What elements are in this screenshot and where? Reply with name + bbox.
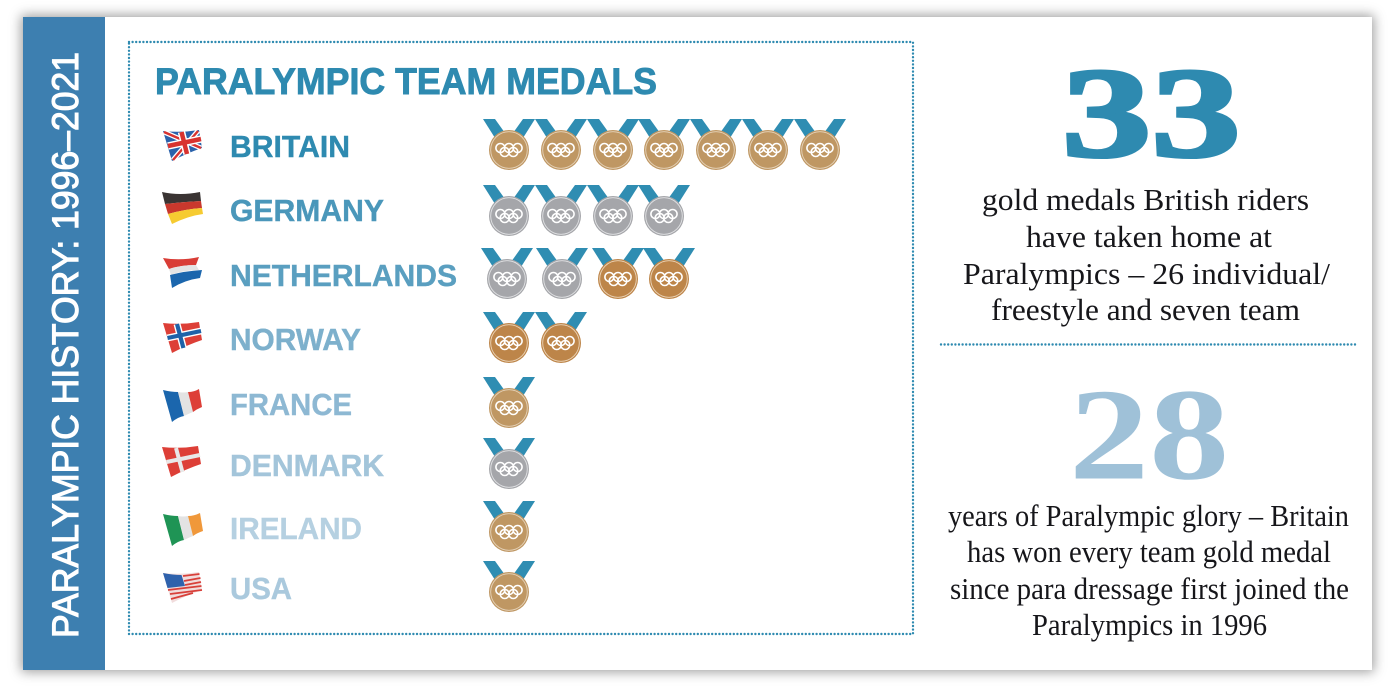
label: Germany: GERMANY — [230, 193, 384, 228]
medal: Ireland — [483, 501, 535, 552]
panel: team medals — [129, 42, 913, 634]
stat number: 28: 28 — [1069, 362, 1229, 507]
flag: USA — [163, 572, 202, 603]
flag: Denmark — [162, 446, 201, 477]
heading: Paralympic team medals: PARALYMPIC TEAM MEDALS — [155, 61, 657, 102]
stat text: gold medals: gold medals British riders — [982, 182, 1309, 217]
stat text: gold medals: have taken home at — [1026, 219, 1272, 254]
label: Norway: NORWAY — [230, 322, 361, 357]
label: Ireland: IRELAND — [230, 511, 362, 546]
stat text: gold medals: freestyle and seven team — [991, 292, 1300, 327]
medals: Netherlands — [481, 248, 695, 299]
side band: Paralympic history — [23, 17, 105, 670]
label: Denmark: DENMARK — [230, 448, 385, 483]
stat text: years of glory: Paralympics in 1996 — [1032, 607, 1267, 642]
label: France: FRANCE — [230, 387, 352, 422]
flag: Norway — [163, 322, 202, 353]
side band: Paralympic history: PARALYMPIC HISTORY: 1996–2021 — [45, 52, 86, 638]
stat text: years of glory: has won every team gold medal — [967, 534, 1331, 569]
medals: Norway — [483, 312, 587, 363]
stat number: 33: 33 — [1062, 42, 1241, 184]
stat text: gold medals: Paralympics – 26 individual/ — [963, 256, 1330, 291]
label: Netherlands: NETHERLANDS — [230, 258, 457, 293]
medal: USA — [483, 561, 535, 612]
flag: Britain — [163, 130, 202, 161]
label: Britain: BRITAIN — [230, 129, 350, 164]
stat text: years of glory — [948, 498, 1349, 642]
medals: Britain — [483, 119, 846, 170]
label: USA: USA — [230, 571, 292, 606]
stat text: gold medals — [963, 182, 1330, 327]
medal: Denmark — [483, 438, 535, 489]
flag: Germany — [162, 192, 203, 224]
flag: France — [163, 389, 202, 422]
medal: France — [483, 377, 535, 428]
flag: Netherlands — [163, 257, 202, 288]
stat text: years of glory: years of Paralympic glory – Britain — [948, 498, 1349, 533]
stat text: years of glory: since para dressage first joined the — [950, 571, 1349, 606]
flag: Ireland — [163, 513, 203, 546]
medals: Germany — [483, 185, 690, 236]
